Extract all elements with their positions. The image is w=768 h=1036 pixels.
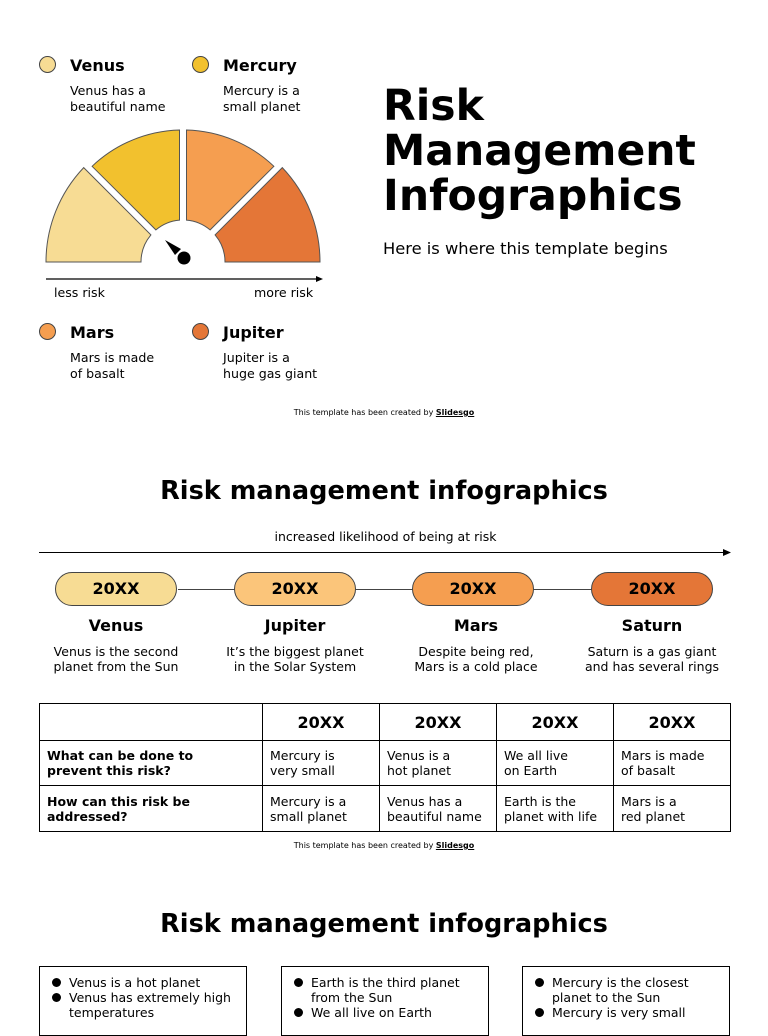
risk table: red planet	[621, 808, 685, 824]
legend: Jupiter	[192, 323, 317, 381]
legend: Venus: Venus has a	[70, 83, 146, 98]
timeline item: Saturn	[585, 572, 719, 674]
risk table: beautiful name	[387, 808, 482, 824]
title: Management	[383, 127, 696, 176]
heading 2: Risk management infographics	[160, 476, 608, 506]
risk table: We all live	[504, 748, 568, 763]
needle	[165, 240, 190, 264]
timeline arrow: increased likelihood of being at risk	[275, 529, 496, 544]
legend: Venus	[39, 56, 166, 114]
text: more risk	[254, 285, 313, 300]
title	[383, 82, 696, 221]
timeline item: Saturn: and has several rings	[585, 659, 719, 674]
box: Mercury: Mercury is very small	[552, 1005, 686, 1020]
risk table: on Earth	[504, 763, 557, 778]
timeline item: Saturn: 20XX	[629, 579, 675, 598]
timeline item: Jupiter: It’s the biggest planet	[226, 644, 364, 659]
legend: Mercury	[192, 56, 300, 114]
risk table: Mars is a	[621, 794, 677, 808]
risk table: Earth is the	[504, 794, 576, 808]
timeline item: Mars: Mars is a cold place	[414, 659, 538, 674]
timeline item: Venus	[54, 572, 178, 674]
legend: Mars: of basalt	[70, 366, 125, 381]
legend: Venus: Venus	[70, 56, 125, 75]
risk table: 20XX	[415, 712, 461, 732]
legend: Mars	[39, 323, 154, 381]
risk table: prevent this risk?	[47, 763, 171, 778]
timeline item: Jupiter	[226, 572, 364, 674]
risk table: planet with life	[504, 808, 597, 824]
scale labels: less risk	[54, 285, 105, 300]
risk table: Venus has a	[387, 794, 462, 808]
legend: Jupiter: Jupiter is a	[223, 350, 290, 365]
timeline item: Mars	[412, 572, 538, 674]
risk table: Mercury is a	[270, 794, 346, 808]
legend: Mars: Mars is made	[70, 350, 154, 365]
gauge chart	[46, 130, 323, 282]
risk table: 20XX	[649, 712, 695, 732]
timeline item: Mars: Mars	[454, 616, 498, 635]
risk table: What can be done to	[47, 748, 193, 763]
risk table: Mercury is	[270, 748, 335, 763]
timeline item: Saturn: Saturn is a gas giant	[588, 644, 716, 659]
title: Risk	[383, 82, 484, 131]
timeline item: Jupiter: 20XX	[272, 579, 318, 598]
risk table: How can this risk be	[47, 794, 190, 808]
risk table: small planet	[270, 808, 347, 824]
timeline arrow	[39, 529, 731, 556]
timeline item: Mars: 20XX	[450, 579, 496, 598]
timeline connector	[178, 589, 592, 590]
box: Earth: We all live on Earth	[311, 1005, 432, 1020]
timeline item: Mars: Despite being red,	[418, 644, 534, 659]
legend: Jupiter: Jupiter	[223, 323, 284, 342]
legend: Mercury: Mercury	[223, 56, 297, 75]
timeline item: Venus: 20XX	[93, 579, 139, 598]
legend: Venus: beautiful name	[70, 99, 166, 114]
legend: Mercury: Mercury is a	[223, 83, 300, 98]
box: Venus: Venus is a hot planet	[69, 975, 200, 990]
timeline item: Saturn: Saturn	[622, 616, 682, 635]
timeline item: Venus: planet from the Sun	[54, 659, 178, 674]
box: Earth: Earth is the third planet from the Sun	[311, 975, 460, 1005]
title: Infographics	[383, 172, 683, 221]
risk table: addressed?	[47, 808, 128, 824]
legend: Jupiter: huge gas giant	[223, 366, 317, 381]
risk table: hot planet	[387, 763, 451, 778]
box: Mercury: Mercury is the closest planet to the Sun	[552, 975, 689, 1005]
box: Earth	[281, 966, 489, 1036]
risk table: Mars is made	[621, 748, 704, 763]
timeline item: Jupiter: Jupiter	[265, 616, 325, 635]
box: Venus: Venus has extremely high temperatures	[69, 990, 231, 1020]
risk table: of basalt	[621, 763, 675, 778]
credit: This template has been created by Slidesgo	[294, 841, 474, 850]
timeline item: Venus: Venus is the second	[54, 644, 178, 659]
risk table: very small	[270, 763, 335, 778]
risk table	[39, 703, 731, 832]
risk table: Venus is a	[387, 748, 450, 763]
legend: Mars: Mars	[70, 323, 114, 342]
timeline item: Venus: Venus	[89, 616, 143, 635]
subtitle: Here is where this template begins	[383, 239, 668, 258]
arrow: risk scale	[46, 276, 323, 282]
risk table: 20XX	[532, 712, 578, 732]
credit: This template has been created by Slidesgo	[294, 408, 474, 417]
box: Venus	[39, 966, 247, 1036]
box: Mercury	[522, 966, 730, 1036]
heading 3: Risk management infographics	[160, 909, 608, 939]
risk table: 20XX	[298, 712, 344, 732]
timeline item: Jupiter: in the Solar System	[234, 659, 356, 674]
legend: Mercury: small planet	[223, 99, 300, 114]
